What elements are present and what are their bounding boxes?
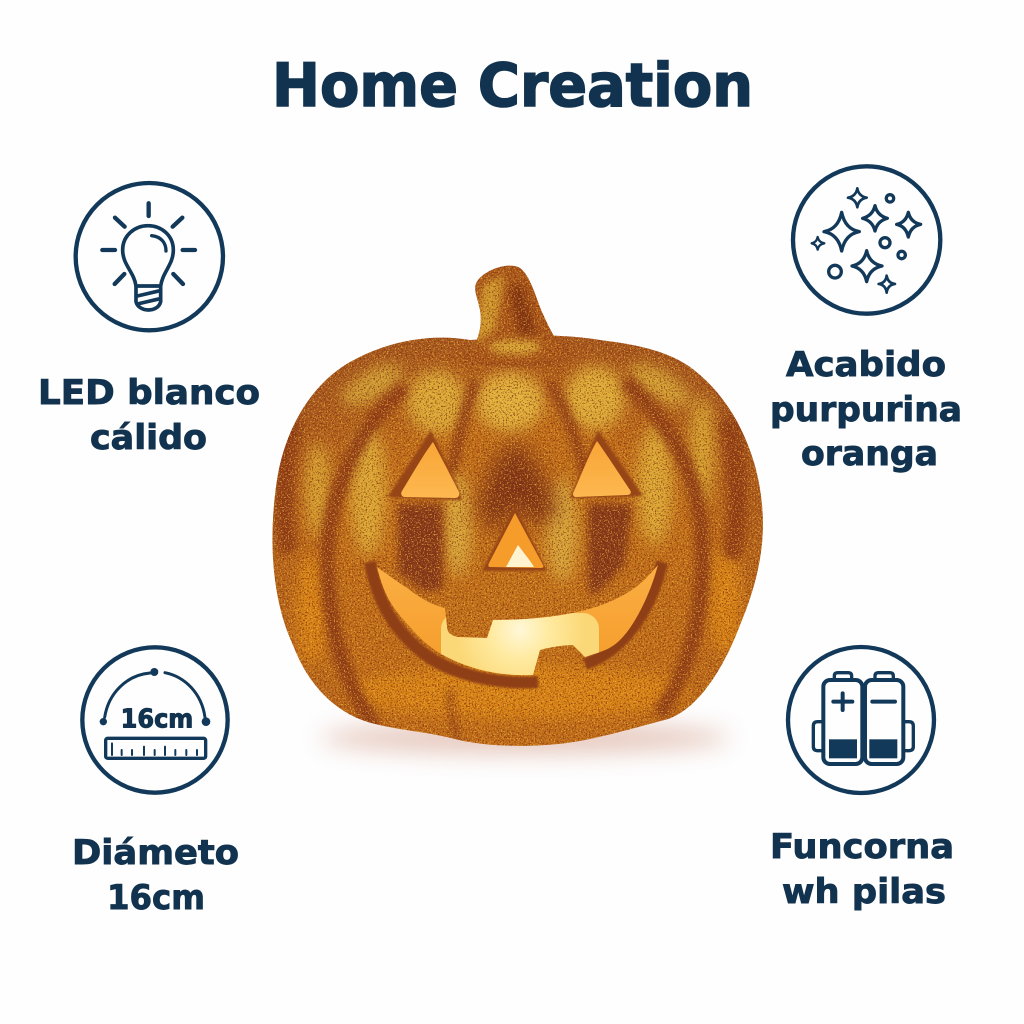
label: Acabido: oranga [801,434,938,474]
glitter texture [260,325,770,755]
dark centre patch [478,440,558,535]
mouth rim [370,562,662,682]
label: Funcorna [770,827,954,912]
pumpkin stem [466,266,567,363]
pumpkin lantern [260,260,770,755]
label: LED: LED blanco [38,373,260,413]
icon: 16cm diameter: 16cm [121,703,193,733]
label: Funcorna: Funcorna [770,827,954,867]
label: Diámetro: 16cm [107,878,205,918]
label: LED: cálido [90,418,207,458]
shadow under pumpkin [320,722,730,754]
icon: batteries [788,647,934,793]
left eye [388,430,462,500]
label: Acabido [770,345,962,474]
icon: sparkles [793,166,940,314]
nose [482,506,547,571]
label: Funcorna: wh pilas [782,872,946,912]
right eye [570,430,643,498]
label: Diámetro: Diámeto [72,833,239,873]
label: Diámetro [72,833,239,918]
label: LED [38,373,260,458]
title: Home Creation [272,51,753,121]
pumpkin body [260,325,770,755]
icon: light bulb [76,183,223,330]
label: Acabido: purpurina [770,390,962,430]
icon: 16cm diameter [82,647,228,793]
label: Acabido: Acabido [786,345,946,385]
glowing mouth with candle [377,565,658,676]
